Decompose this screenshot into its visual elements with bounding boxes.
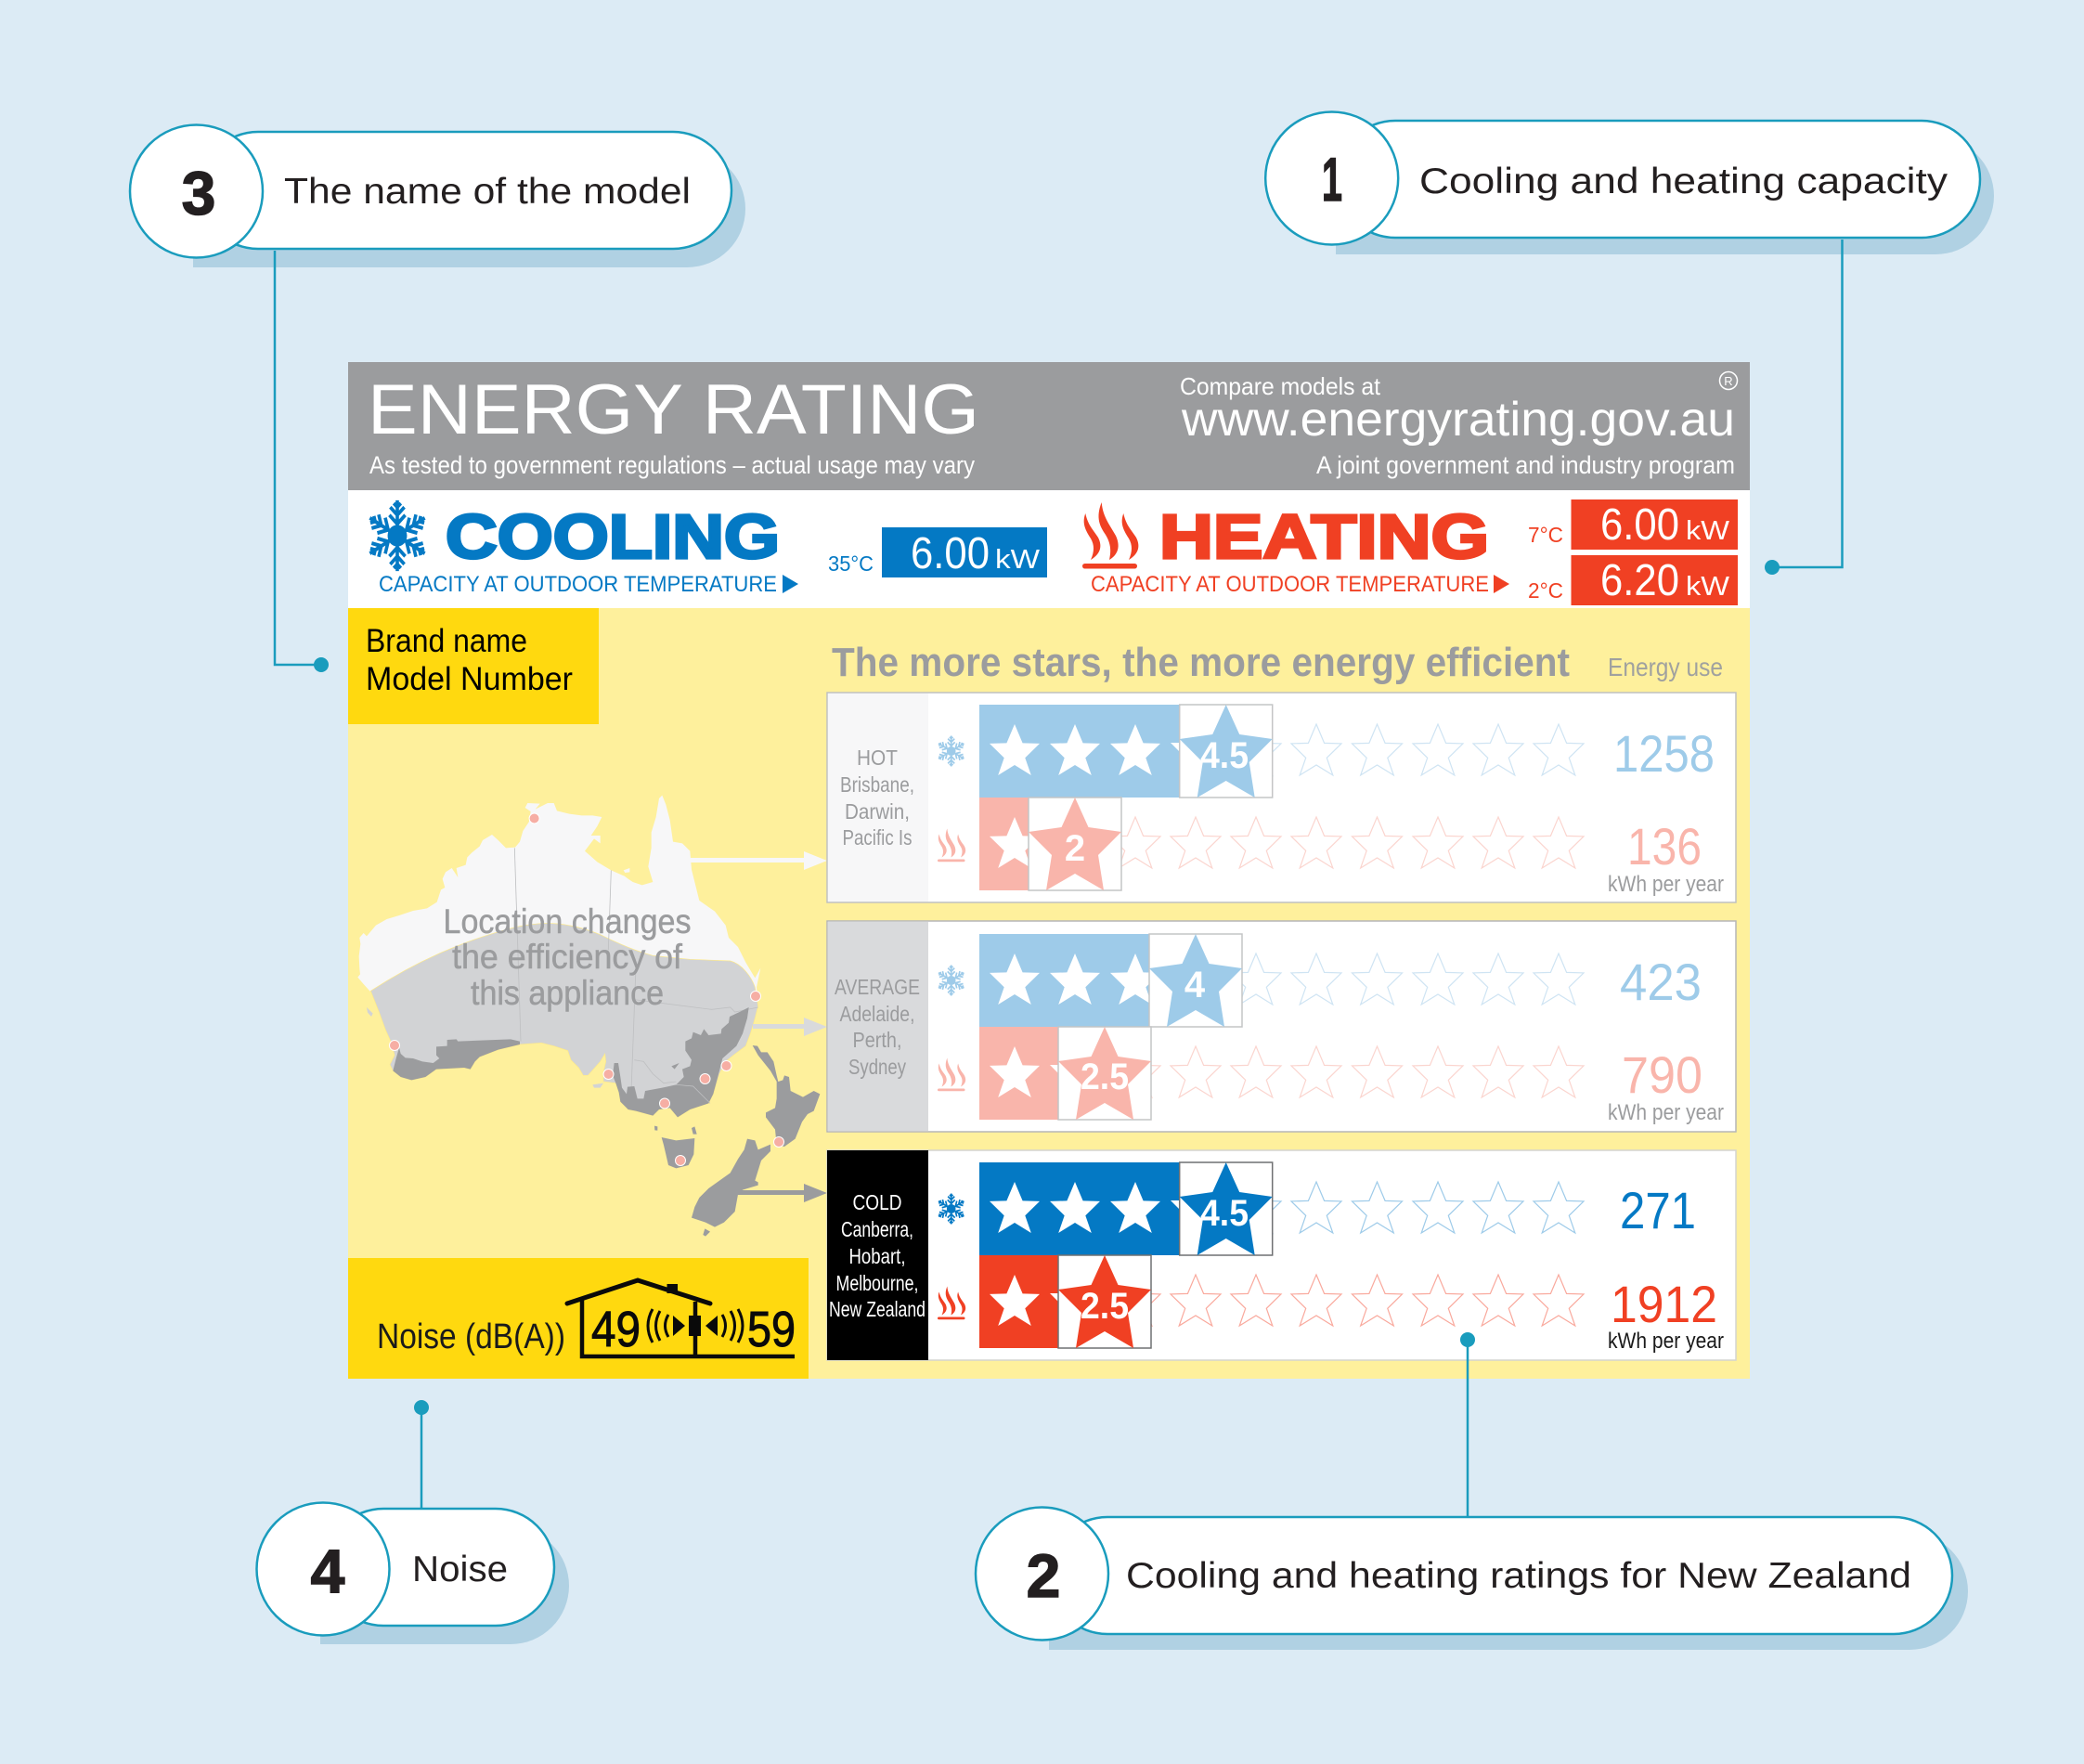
panel: average climate xyxy=(827,921,1736,1132)
cooling capacity: CAPACITY AT OUTDOOR TEMPERATURE xyxy=(379,572,777,597)
energy use values xyxy=(1608,953,1724,1125)
cooling capacity: 6.00 xyxy=(911,529,990,578)
heating capacity: 6.20 xyxy=(1600,556,1679,605)
average climate label xyxy=(835,975,920,1079)
label header bar: ENERGY RATING xyxy=(368,370,979,449)
icon: cooling xyxy=(937,735,965,767)
label header bar: www.energyrating.gov.au xyxy=(1181,393,1735,447)
icon: heat flames xyxy=(1082,502,1138,568)
average climate label: Sydney xyxy=(848,1055,906,1079)
energy use values: kWh per year xyxy=(1608,1329,1724,1354)
heating star rating 2.5: 2.5 xyxy=(1081,1057,1129,1097)
label header bar xyxy=(348,362,1750,490)
brand and model box xyxy=(348,608,599,724)
energy use values: 790 xyxy=(1622,1045,1702,1104)
hot climate label: Darwin, xyxy=(845,799,910,824)
noise box xyxy=(348,1258,809,1379)
heating capacity: HEATING xyxy=(1159,502,1489,572)
map: state borders xyxy=(514,848,758,1108)
heating star rating 2.5 xyxy=(979,1255,1584,1348)
heating capacity: kW xyxy=(1686,516,1730,546)
callout 1: cooling and heating capacity: 1 xyxy=(1322,145,1342,214)
arrow: hot zone xyxy=(691,851,827,870)
callout 1: cooling and heating capacity xyxy=(1265,111,1994,254)
map: hot zone xyxy=(357,796,760,1024)
callout 4: noise: 4 xyxy=(311,1537,345,1605)
callout 4: noise: Noise xyxy=(412,1550,508,1589)
energy use values: kWh per year xyxy=(1608,872,1724,897)
noise box: 59 xyxy=(747,1302,796,1357)
cooling star rating 4.5 xyxy=(979,705,1584,798)
cold climate label: New Zealand xyxy=(829,1297,926,1321)
icon: snowflake xyxy=(366,500,429,571)
connector lines with endpoint dots xyxy=(275,240,1842,1516)
label header bar: R xyxy=(1724,374,1733,388)
cold climate label: Melbourne, xyxy=(835,1271,919,1295)
label header bar: A joint government and industry program xyxy=(1316,451,1735,479)
callout 4: noise xyxy=(256,1502,569,1644)
heating star rating 2 xyxy=(979,798,1584,890)
cold climate label: COLD xyxy=(852,1190,902,1214)
average climate label: Adelaide, xyxy=(839,1002,915,1026)
label header bar: Compare models at xyxy=(1180,372,1381,400)
energy use values: 1258 xyxy=(1613,724,1715,783)
brand and model box: Brand name xyxy=(366,623,527,659)
average climate label: AVERAGE xyxy=(835,975,920,999)
callout 3: the name of the model xyxy=(130,124,745,267)
map: Australia and New Zealand climate zones xyxy=(357,796,820,1237)
cooling star rating 4.5: 4.5 xyxy=(1200,735,1249,776)
cooling capacity: 35°C xyxy=(828,551,874,576)
heating star rating 2.5: 2.5 xyxy=(1081,1286,1129,1327)
brand and model box: Model Number xyxy=(366,661,573,697)
callout 2: cooling and heating ratings for New Zealand xyxy=(976,1508,1968,1650)
cooling capacity: COOLING xyxy=(446,502,780,572)
map caption xyxy=(444,902,691,1012)
panel: hot climate xyxy=(827,693,1736,902)
map caption: Location changes xyxy=(444,902,691,940)
heating star rating 2: 2 xyxy=(1065,828,1085,869)
callout 3: the name of the model: 3 xyxy=(182,159,215,227)
cooling star rating 4: 4 xyxy=(1184,965,1206,1005)
label header bar: As tested to government regulations – actual usage may vary xyxy=(369,451,975,479)
heating star rating 2.5 xyxy=(979,1027,1584,1120)
arrow: cold zone xyxy=(738,1184,827,1202)
map caption: the efficiency of xyxy=(452,938,683,976)
icon: heating xyxy=(938,1058,965,1091)
map: Victoria border xyxy=(676,1084,710,1103)
panel: cold climate xyxy=(827,1150,1736,1360)
cooling capacity xyxy=(366,500,1047,597)
icon: house with speakers xyxy=(567,1280,795,1356)
energy use values xyxy=(1608,1181,1724,1354)
noise box: 49 xyxy=(591,1302,641,1357)
noise box: Noise (dB(A)) xyxy=(377,1317,565,1356)
map: cold zones xyxy=(393,1007,820,1237)
cold climate label: Hobart, xyxy=(848,1244,906,1268)
energy use values: kWh per year xyxy=(1608,1100,1724,1125)
map: average zone xyxy=(370,924,758,1117)
heading: star rating: The more stars, the more energy efficient xyxy=(832,640,1570,685)
map: small islands xyxy=(624,868,629,873)
arrow: average zone xyxy=(753,1018,827,1036)
cooling star rating 4 xyxy=(979,934,1584,1027)
heating capacity: 6.00 xyxy=(1600,500,1679,550)
heating capacity xyxy=(1082,499,1738,605)
energy use values: 136 xyxy=(1627,817,1702,876)
capacity strip xyxy=(348,490,1750,608)
hot climate label: HOT xyxy=(857,746,898,770)
icon: cooling xyxy=(937,1193,965,1225)
energy use values xyxy=(1608,724,1724,897)
cooling capacity: kW xyxy=(995,545,1041,575)
heating capacity: 2°C xyxy=(1528,578,1563,603)
energy use values: 423 xyxy=(1620,953,1702,1011)
icon: heating xyxy=(938,828,965,862)
heading: star rating: Energy use xyxy=(1608,653,1723,681)
cooling star rating 4.5: 4.5 xyxy=(1200,1193,1249,1234)
icon: cooling xyxy=(937,965,965,996)
average climate label: Perth, xyxy=(852,1028,902,1052)
heating capacity: CAPACITY AT OUTDOOR TEMPERATURE xyxy=(1091,572,1489,597)
map: city markers xyxy=(390,813,783,1166)
hot climate label: Brisbane, xyxy=(840,772,914,797)
cold climate label: Canberra, xyxy=(841,1217,913,1241)
callout 2: cooling and heating ratings for New Zealand: Cooling and heating ratings for New Zealand xyxy=(1126,1556,1911,1596)
map: offshore islands xyxy=(367,1007,603,1088)
hot climate label: Pacific Is xyxy=(843,825,912,850)
energy label xyxy=(348,362,1750,1379)
cold climate label xyxy=(829,1190,926,1321)
heating capacity: kW xyxy=(1686,572,1730,602)
hot climate label xyxy=(840,746,914,850)
callout 3: the name of the model: The name of the model xyxy=(284,172,691,212)
map caption: this appliance xyxy=(471,974,664,1012)
energy use values: 1912 xyxy=(1611,1275,1717,1333)
cooling star rating 4.5 xyxy=(979,1162,1584,1255)
heating capacity: 7°C xyxy=(1528,523,1563,547)
yellow body xyxy=(348,608,1750,1379)
icon: heating xyxy=(938,1287,965,1319)
callout 1: cooling and heating capacity: Cooling and heating capacity xyxy=(1419,162,1948,201)
energy use values: 271 xyxy=(1620,1181,1696,1239)
callout 2: cooling and heating ratings for New Zealand: 2 xyxy=(1027,1541,1060,1610)
